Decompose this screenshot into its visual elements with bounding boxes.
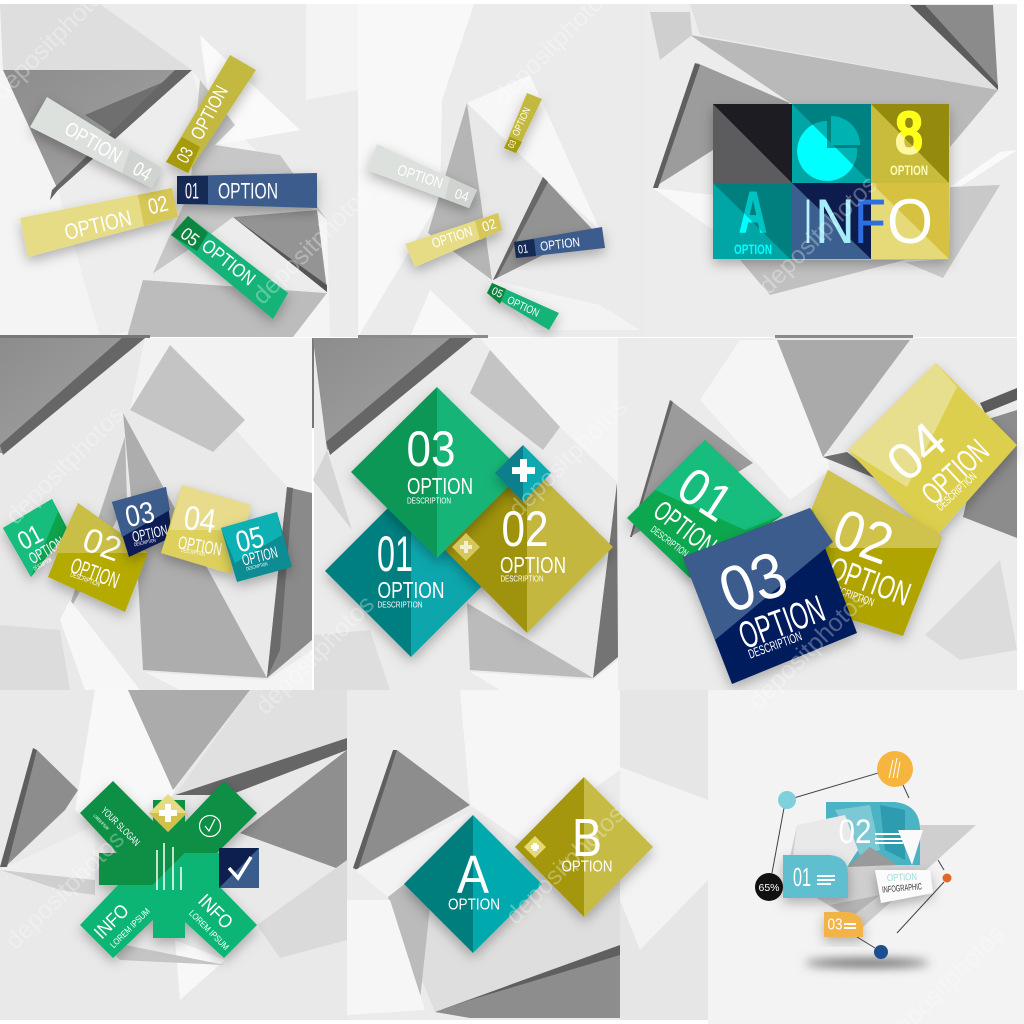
card 04 glossy yellow [848,363,1017,540]
watermark text: depositphotos [503,393,633,523]
small tag 03 [504,93,542,153]
card 03 [112,487,172,557]
tile: letter A: A [739,180,767,246]
panel: ribbon option tags large [0,4,358,338]
white option card [875,870,933,903]
navy check square [219,848,259,888]
card 02 glossy olive [790,470,942,636]
diamond 03: 03 [406,421,456,477]
card 02 glossy olive: DESCRIPTION [824,581,876,609]
card 03 glossy navy: 03 [710,537,796,627]
diamond 01: DESCRIPTION [378,600,423,610]
diamond 02: 02 [502,501,548,557]
tag 01: 01 [185,178,199,204]
card 01 [3,499,68,577]
small tag 04: OPTION [395,162,445,192]
panel: ribbon option tags small [358,4,645,338]
card 02: 02 [838,813,872,851]
card 02: OPTION [67,553,123,593]
yellow plus badge [149,794,187,832]
light lower arms [80,853,257,958]
grey facet shape [785,825,976,927]
small tag 03: 03 [506,138,518,150]
tag 04: 04 [129,158,155,186]
card 05: OPTION [240,544,280,570]
INFO heading: N [815,187,855,257]
diamond 03 [351,387,523,558]
tile: dark square [713,104,792,183]
card 01 glossy green: OPTION [648,495,722,561]
watermark text: depositphotos [0,400,130,530]
tag 04: OPTION [61,118,125,168]
watermark text: depositphotos [0,825,130,955]
card 02 glossy olive: 02 [825,497,901,577]
diamond 03: DESCRIPTION [407,496,451,506]
small tag 01: OPTION [539,234,581,254]
INFO heading: F [854,187,886,257]
card 02 [790,802,920,885]
panel 8 background facets [347,690,708,1020]
white triangle [898,830,923,865]
INFO heading: I [804,187,812,257]
card 04: DESCRIPTION [181,548,205,558]
INFO heading [804,187,933,257]
panel: network infographic [708,690,1024,1024]
watermark text: depositphotos [250,590,380,720]
info right text: INFO [193,890,237,934]
panel 6 background facets [618,338,1017,690]
card 03 [824,912,863,937]
small tag 05 [487,283,559,330]
diamond B: OPTION [562,858,612,876]
watermark text: depositphotos [743,585,873,715]
card 04 glossy yellow: 04 [876,411,958,493]
card 03 glossy navy: OPTION [733,588,831,658]
card 01: DESCRIPTION [33,557,53,573]
tag 02: 02 [145,191,171,219]
card 03: OPTION [131,522,169,546]
panel 7 background facets [0,690,347,1020]
dark arm left [80,781,185,885]
tile: letter A: OPTION [734,241,772,257]
panel: large glossy cards [618,338,1017,690]
panel: small glossy cards [0,338,314,690]
diamond 02: DESCRIPTION [500,574,544,584]
card 01: 01 [793,862,811,892]
white option card: OPTION [887,872,917,884]
tag 01: OPTION [218,178,278,204]
diamond B [515,777,653,917]
tile: numeral 8: 8 [895,100,923,166]
card 05 [221,512,292,582]
panel 5 background facets [313,338,618,690]
panel: diamonds [313,338,618,690]
diamond 03: OPTION [407,473,473,499]
small tag 05: 05 [489,285,505,301]
tag 03: OPTION [187,82,233,144]
info left text: INFO [90,900,134,944]
card 01: OPTION [26,534,68,568]
card 01 glossy green: 01 [667,457,743,533]
tile: numeral 8: OPTION [890,162,928,178]
diamond A: A [457,845,489,905]
card 02: DESCRIPTION [69,571,101,589]
small tag 03: OPTION [511,106,533,138]
card 01 [783,855,848,898]
tag 05 [171,216,288,319]
small tag 02 [405,213,502,267]
connector lines [772,768,944,948]
watermark text: depositphotos [500,800,630,930]
slogan text: YOUR SLOGAN [98,805,142,849]
circle: 65 percent [755,873,783,901]
circle: 65 percent: 65% [758,882,780,894]
panel 4 background facets [0,338,314,690]
panel 3 background facets [645,4,1017,338]
circle: teal node [778,791,796,809]
info left text: LOREM IPSUM [108,906,152,950]
watermark text: depositphotos [247,180,377,310]
small tag 04: 04 [453,185,471,205]
card 03: DESCRIPTION [134,538,157,548]
small plus badge [524,836,546,858]
card 03: 03 [828,916,843,934]
plus badge teal [495,445,551,502]
card 03 glossy navy: DESCRIPTION [746,628,804,662]
card 01 glossy green [627,440,783,578]
info right text [187,890,237,952]
check circle icon [200,816,220,836]
tile: yellow [871,183,949,259]
tag 02 [20,188,178,257]
panel 2 background facets [358,4,645,338]
info grid tiles [713,100,949,259]
card 02: 02 [78,521,126,569]
panel: info grid [645,4,1017,338]
small tag 02: 02 [480,215,498,235]
small tag 02: OPTION [430,223,474,251]
tile: numeral 8 [871,100,949,183]
plus badge yellow [452,533,480,561]
info right text: LOREM IPSUM [187,908,231,952]
ground shadow [805,958,929,968]
tag 05: OPTION [197,236,259,290]
card 03: 03 [122,496,158,534]
card 05: 05 [232,521,268,559]
card 02 glossy olive: OPTION [824,549,916,613]
tag 04 [30,97,162,188]
diamond 01: 01 [377,526,413,582]
card 04: OPTION [177,532,223,560]
diamond B: B [572,808,602,868]
lower grey facet [830,895,880,918]
card 04 glossy yellow: DESCRIPTION [935,471,979,513]
tag 03: 03 [173,144,197,166]
white option card: INFOGRAPHIC [882,881,923,895]
dark arm right [185,781,257,853]
tag 03 [166,55,256,173]
diamond A: OPTION [448,896,500,914]
tile: pie chart [792,104,871,183]
cross shape [80,781,257,958]
watermark text: depositphotos [753,170,883,300]
diamond 01: OPTION [378,577,444,603]
small tag 01: 01 [517,241,529,257]
circle: orange node [942,874,952,882]
panel 9 background [708,690,1024,1024]
INFO heading: O [887,187,933,257]
card 05: DESCRIPTION [246,561,269,573]
circle: yellow node with bars [877,751,913,787]
diamond A [404,815,542,953]
small tag 04 [367,144,477,208]
slogan text [92,805,142,849]
card 02 [48,503,148,612]
diamond 01 [325,485,497,657]
info left text [90,900,152,950]
small tag 05: OPTION [505,294,541,320]
tag 01 [177,173,317,208]
panel: A B diamonds [347,690,708,1020]
tag 02: OPTION [62,205,134,245]
small tag 01 [514,227,605,258]
card 04: 04 [182,499,218,541]
card 01: 01 [12,518,48,556]
circle: blue node [874,945,888,959]
tile: letter A [713,180,792,259]
tag 05: 05 [177,224,203,250]
tile: navy [792,183,871,259]
slogan text: LOREM IPSUM [92,813,110,831]
card 03 glossy navy [683,508,857,684]
panel: star cross infographic [0,690,347,1020]
diamond 02: OPTION [500,552,566,578]
card 04 [161,485,251,574]
card 01 glossy green: DESCRIPTION [648,524,690,560]
bar marks [157,843,181,890]
diamond 02 [442,462,613,633]
panel 1 background facets [0,4,358,338]
